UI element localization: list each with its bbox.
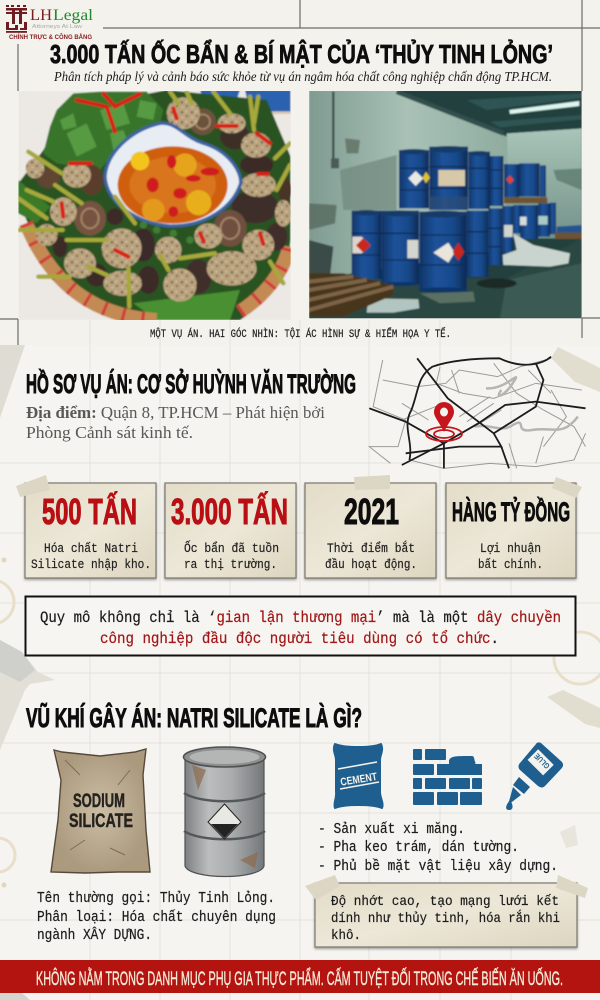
text: common name: Phân loại: Hóa chất chuyên dụng bbox=[37, 909, 276, 926]
icon: logo emblem bbox=[6, 5, 27, 33]
callout: scale statement: công nghiệp đầu độc người tiêu dùng có tổ chức. bbox=[100, 629, 499, 648]
uses list: - Phủ bề mặt vật liệu xây dựng. bbox=[318, 858, 558, 875]
stat card: hàng tỷ đồng: bất chính. bbox=[478, 557, 543, 572]
logo: LHLegal: CHÍNH TRỰC & CÔNG BẰNG bbox=[9, 33, 92, 41]
stat card: 500 tấn: 500 TẤN bbox=[42, 491, 137, 532]
stat card: 2021 bbox=[305, 475, 436, 578]
stat card: 3.000 tấn: ra thị trường. bbox=[184, 557, 277, 572]
panel: case file: Phòng Cảnh sát kinh tế. bbox=[26, 423, 193, 442]
illustration: sodium silicate sack bbox=[51, 749, 150, 873]
stat card: 500 tấn: Silicate nhập kho. bbox=[31, 557, 151, 572]
icon: brick wall bbox=[413, 749, 482, 805]
stat card: hàng tỷ đồng bbox=[446, 477, 582, 578]
note card: viscosity: khô. bbox=[331, 928, 361, 944]
stat card: 500 tấn bbox=[16, 475, 156, 578]
stat card: 3.000 tấn bbox=[165, 483, 296, 578]
illustration: sodium silicate sack: SODIUM bbox=[73, 791, 125, 812]
lemongrass bbox=[18, 92, 290, 307]
uses list: - Pha keo trám, dán tường. bbox=[318, 840, 519, 856]
photo: snail dish bbox=[18, 90, 292, 320]
pallet bbox=[309, 273, 393, 317]
warning banner bbox=[0, 960, 600, 993]
stat card: 2021: 2021 bbox=[344, 491, 399, 532]
heading: weapon: VŨ KHÍ GÂY ÁN: NATRI SILICATE LÀ GÌ? bbox=[26, 702, 362, 733]
caption: MỘT VỤ ÁN. HAI GÓC NHÌN: TỘI ÁC HÌNH SỰ & HIỂM HỌA Y TẾ. bbox=[150, 327, 451, 341]
panel: case file bbox=[26, 357, 586, 468]
icon: cement bag bbox=[334, 744, 383, 808]
text: common name bbox=[37, 891, 276, 944]
meat bbox=[26, 97, 292, 302]
subtitle: Phân tích pháp lý và cảnh báo sức khỏe từ vụ án ngâm hóa chất công nghiệp chấn động TP.HCM. bbox=[53, 70, 552, 85]
icon: location pin bbox=[426, 402, 462, 441]
stat card: 2021: Thời điểm bắt bbox=[327, 540, 415, 556]
note card: viscosity: Độ nhớt cao, tạo mạng lưới kết bbox=[331, 893, 559, 910]
stat card: 3.000 tấn: Ốc bẩn đã tuồn bbox=[184, 540, 279, 556]
illustration: sodium silicate sack: SILICATE bbox=[69, 811, 133, 832]
uses list: - Sản xuất xi măng. bbox=[318, 821, 465, 838]
panel: stat cards bbox=[16, 475, 582, 578]
stat card: hàng tỷ đồng: Lợi nhuận bbox=[480, 541, 541, 556]
plastic sheet bbox=[503, 233, 570, 267]
bowl bbox=[105, 123, 241, 226]
location text: Địa điểm: Quận 8, TP.HCM – Phát hiện bởi bbox=[26, 403, 325, 422]
stat card: 500 tấn: Hóa chất Natri bbox=[44, 541, 138, 556]
snails bbox=[37, 108, 292, 294]
callout: scale statement bbox=[26, 596, 576, 656]
illustration: metal drum bbox=[184, 747, 266, 876]
icon: cement bag: CEMENT bbox=[340, 771, 378, 789]
logo: LHLegal: LH bbox=[30, 7, 52, 24]
logo: LHLegal: Legal bbox=[53, 7, 94, 24]
back barrels bbox=[504, 164, 519, 197]
heading: case file: HỒ SƠ VỤ ÁN: CƠ SỞ HUỲNH VĂN TRƯỜNG bbox=[26, 367, 356, 399]
logo: LHLegal bbox=[0, 0, 103, 43]
stat card: 2021: đầu hoạt động. bbox=[325, 557, 417, 572]
stacked barrels bbox=[399, 146, 503, 210]
note card: viscosity bbox=[305, 875, 588, 947]
photo: chemical barrels warehouse bbox=[309, 90, 582, 320]
text: common name: Tên thường gọi: Thủy Tinh Lỏng. bbox=[37, 891, 275, 907]
logo: LHLegal: Attorneys At Law bbox=[32, 24, 83, 30]
callout: scale statement: Quy mô không chỉ là ‘gian lận thương mại’ mà là một dây chuyền bbox=[40, 609, 561, 627]
uses list bbox=[318, 821, 558, 875]
note card: viscosity: dính như thủy tinh, hóa rắn khi bbox=[331, 909, 560, 927]
icon: glue bottle bbox=[506, 742, 563, 810]
stat card: 3.000 tấn: 3.000 TẤN bbox=[171, 491, 288, 532]
lower barrels bbox=[352, 206, 513, 293]
icon: glue bottle: GLUE bbox=[532, 751, 552, 770]
text: common name: ngành XÂY DỰNG. bbox=[37, 926, 152, 944]
map bbox=[369, 357, 586, 468]
